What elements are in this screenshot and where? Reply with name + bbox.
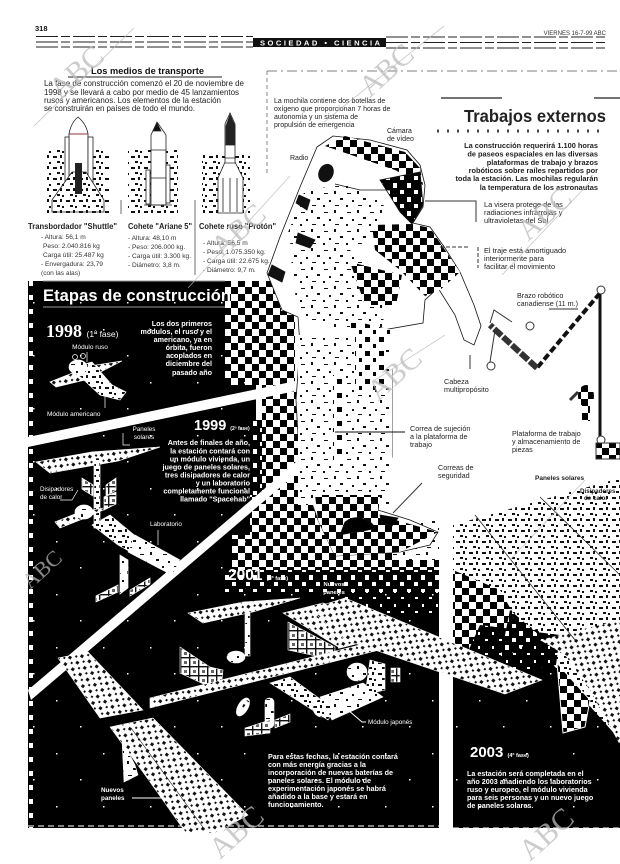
specs: Ariane: - Peso: 206.000 kg. bbox=[128, 244, 185, 251]
specs: Proton: - Peso: 1.075.350 kg. bbox=[203, 249, 266, 256]
text 1999: juego de paneles solares, bbox=[162, 462, 250, 472]
illustration: astronaut bbox=[267, 136, 481, 556]
specs: Shuttle: Carga útil: 25.487 kg bbox=[43, 252, 104, 259]
panel: transport bbox=[28, 66, 276, 277]
label: modulo japones: Módulo japonés bbox=[368, 719, 412, 726]
text 2001: incorporación de nuevas baterías de bbox=[268, 768, 393, 777]
new panels bbox=[58, 652, 248, 833]
white diagonal band 2 bbox=[28, 450, 310, 700]
illustration: robotic arm bbox=[487, 286, 620, 459]
label: mochila: oxígeno que proporcionan 7 horas de bbox=[274, 106, 390, 113]
text: trabajos externos: toda la estación. Las mochilas regularán bbox=[455, 174, 598, 183]
date line: VIERNES 16-7-99 ABC bbox=[544, 31, 607, 37]
intro text: se construirán en países de todo el mundo. bbox=[44, 104, 195, 113]
section header bbox=[36, 36, 606, 48]
callout: plataforma: piezas bbox=[512, 445, 533, 454]
label: camara bbox=[387, 128, 414, 143]
callout: correas: seguridad bbox=[438, 471, 470, 480]
text: trabajos externos: la temperatura de los astronautas bbox=[480, 183, 598, 192]
text: trabajos externos: plataformas de trabajo y brazos bbox=[487, 158, 598, 167]
icon: proton bbox=[202, 113, 250, 215]
text 1999: y un laboratorio bbox=[196, 478, 251, 488]
specs: Ariane: - Carga útil: 3.300 kg. bbox=[128, 253, 191, 260]
label: nuevos paneles top: Nuevos bbox=[324, 582, 344, 588]
text 2001: Para estas fechas, la estación contará bbox=[268, 752, 399, 761]
watermark ABC labels: ABC bbox=[361, 341, 429, 407]
year 1998: 1998 (1ª fase) bbox=[46, 321, 119, 341]
specs: Shuttle: Peso: 2.040.816 kg bbox=[43, 243, 100, 250]
label: camara: Cámara bbox=[387, 128, 412, 135]
specs: Ariane: - Altura: 48,10 m bbox=[128, 235, 177, 242]
icon: ariane bbox=[128, 122, 178, 215]
text: trabajos externos: robóticos sobre raíles repartidos por bbox=[469, 166, 598, 175]
intro text bbox=[44, 79, 245, 113]
panel: bottom right bbox=[453, 478, 620, 828]
callout: cabeza bbox=[444, 355, 489, 394]
specs: Shuttle: - Envergadura: 23,79 bbox=[41, 261, 103, 268]
section header: SOCIEDAD • CIENCIA bbox=[260, 38, 381, 48]
label: paneles solares: solares bbox=[134, 434, 154, 441]
watermark ABC labels: ABC bbox=[205, 197, 273, 263]
text 1998: acoplados en bbox=[166, 351, 212, 360]
icon: station 1998 bbox=[50, 352, 126, 408]
text 1999: un módulo vivienda, un bbox=[170, 454, 250, 464]
watermarks bbox=[34, 26, 592, 560]
label: nuevos paneles top: paneles bbox=[323, 590, 345, 596]
callout: traje bbox=[440, 246, 566, 271]
label: Ariane: Cohete "Ariane 5" bbox=[128, 222, 192, 231]
specs: Proton bbox=[203, 240, 270, 274]
callout: plataforma: y almacenamiento de bbox=[512, 437, 580, 446]
text 2001: experimentación japonés se habrá bbox=[268, 784, 387, 793]
text 1998: Los dos primeros bbox=[152, 319, 212, 328]
heading: etapas: Etapas de construcción bbox=[43, 287, 231, 305]
text 1999 bbox=[162, 438, 251, 504]
label: laboratorio: Laboratorio bbox=[150, 521, 182, 528]
watermark ABC labels: ABC bbox=[511, 181, 579, 247]
text 2003 panel bbox=[467, 744, 594, 810]
intro text: rusos y americanos. Los elementos de la estación bbox=[44, 96, 221, 105]
panel: 1999 bbox=[36, 418, 251, 602]
callout: traje: interiormente para bbox=[484, 254, 545, 263]
specs: Proton: - Altura: 56,5 m bbox=[203, 240, 248, 247]
label: disipadores right: de calor bbox=[584, 495, 608, 502]
text 2003 panel: 2003 (4ª fase) bbox=[470, 744, 529, 761]
label: mochila: propulsión de emergencia bbox=[274, 122, 355, 129]
text 1999: completamente funcional bbox=[163, 486, 250, 496]
text 2001: funcionamiento. bbox=[268, 800, 324, 809]
panel: black background bbox=[28, 281, 439, 828]
watermark ABC labels: ABC bbox=[17, 545, 67, 594]
callout: brazo bbox=[517, 291, 578, 309]
text: trabajos externos bbox=[455, 141, 598, 192]
text 2003 panel: año 2003 añadiendo los laboratorios bbox=[467, 777, 592, 786]
text: trabajos externos: de paseos espaciales en las diversas bbox=[467, 150, 598, 158]
label: paneles solares right: Paneles solares bbox=[535, 475, 585, 482]
callout: cabeza: Cabeza bbox=[444, 377, 469, 386]
callout: brazo: Brazo robótico bbox=[517, 291, 563, 300]
callout: traje: facilitar el movimiento bbox=[484, 262, 555, 271]
text 2001 bbox=[268, 752, 399, 809]
callout: visera: La visera protege de las bbox=[484, 200, 563, 209]
label: paneles solares: Paneles bbox=[133, 426, 155, 433]
intro text: La fase de construcción comenzó el 20 de noviembre de bbox=[44, 79, 245, 88]
callout: correa: trabajo bbox=[410, 440, 432, 449]
specs: Ariane: - Diámetro: 3,8 m. bbox=[128, 262, 181, 269]
label: disipadores: de calor bbox=[40, 494, 62, 501]
callout: plataforma bbox=[512, 429, 581, 454]
callout: correa bbox=[335, 424, 470, 449]
specs: Shuttle: (con las alas) bbox=[41, 270, 80, 277]
specs: Proton: - Carga útil: 22.675 kg. bbox=[203, 258, 270, 265]
text 1998: americano, ya en bbox=[154, 335, 212, 344]
label: disipadores bbox=[40, 486, 73, 501]
label: nuevos paneles bbox=[101, 787, 165, 802]
callout: correas bbox=[393, 463, 474, 513]
watermark ABC labels: ABC bbox=[203, 799, 271, 864]
callout: correa: Correa de sujeción bbox=[410, 424, 470, 433]
callout: plataforma: Plataforma de trabajo bbox=[512, 429, 581, 438]
icon: station 2001 bbox=[150, 598, 407, 736]
callout: traje: El traje está amortiguado bbox=[484, 246, 566, 255]
callout: correa: a la plataforma de bbox=[410, 432, 468, 441]
icon: small astronaut bbox=[570, 385, 594, 421]
year 2001: 2001 (3ª fase) bbox=[228, 567, 288, 584]
text 1999: la estación contará con bbox=[170, 446, 250, 456]
callout: brazo: canadiense (11 m.) bbox=[517, 299, 578, 308]
label: disipadores right bbox=[580, 488, 616, 502]
icon: station 1999 bbox=[36, 433, 180, 602]
text: trabajos externos: La construcción requerirá 1.100 horas bbox=[464, 141, 598, 150]
intro text: 1998 y se llevará a cabo por medio de 45 lanzamientos bbox=[44, 88, 239, 97]
text 2003 panel: ruso y europeo, el módulo vivienda bbox=[467, 785, 589, 794]
label: mochila: La mochila contiene dos botellas de bbox=[274, 98, 385, 105]
text 1998 bbox=[140, 319, 213, 377]
text 1999: tres disipadores de calor bbox=[165, 470, 250, 480]
year 1999: 1999 (2ª fase) bbox=[194, 418, 250, 434]
text 2003 panel: de paneles solares. bbox=[467, 801, 533, 810]
long truss bbox=[310, 598, 542, 694]
text 2001: con más energía gracias a la bbox=[268, 760, 367, 769]
label: paneles solares bbox=[133, 426, 155, 441]
watermark ABC labels: ABC bbox=[43, 39, 111, 105]
icon: shuttle bbox=[47, 117, 109, 214]
label: disipadores: Disipadores bbox=[40, 486, 73, 493]
text 1999: llamado "Spacehab" bbox=[180, 494, 250, 504]
callout: visera: ultravioletas del Sol bbox=[484, 216, 548, 225]
specs: Proton: - Diámetro: 9,7 m. bbox=[203, 267, 256, 274]
label: Proton: Cohete ruso "Protón" bbox=[199, 222, 276, 231]
label: nuevos paneles: paneles bbox=[101, 795, 125, 802]
heading: transport: Los medios de transporte bbox=[91, 66, 204, 76]
page number: 318 bbox=[35, 24, 48, 33]
label: camara: de vídeo bbox=[387, 136, 414, 143]
text 2001: añadido a la base y estará en bbox=[268, 792, 367, 801]
white diagonal band 1 bbox=[28, 378, 310, 447]
label: mochila bbox=[274, 98, 390, 129]
callout: visera bbox=[425, 200, 563, 225]
callout: correas: Correas de bbox=[438, 463, 474, 472]
text 2003 panel: para seis personas y un nuevo juego bbox=[467, 793, 594, 802]
label: modulo americano: Módulo americano bbox=[47, 411, 101, 418]
text 1998: diciembre del bbox=[166, 359, 212, 368]
text 1998: módulos, el ruso y el bbox=[140, 327, 212, 336]
specs: Shuttle bbox=[41, 234, 104, 277]
label: mochila: autonomía y un sistema de bbox=[274, 114, 358, 121]
callout: cabeza: multipropósito bbox=[444, 385, 489, 394]
watermark ABC labels: ABC bbox=[353, 37, 421, 103]
label: disipadores right: Disipadores bbox=[580, 488, 616, 495]
text 1998: órbita, fueron bbox=[166, 343, 212, 352]
heading: etapas bbox=[43, 281, 231, 307]
panel: 2001 bbox=[58, 567, 542, 833]
label: nuevos paneles top bbox=[323, 582, 345, 596]
callout: visera: radiaciones infrarrojas y bbox=[484, 208, 563, 217]
specs: Ariane bbox=[128, 235, 191, 269]
text 2001: paneles solares. El módulo de bbox=[268, 776, 371, 785]
text 1998: pasado año bbox=[172, 368, 213, 377]
specs: Shuttle: - Altura: 56,1 m bbox=[41, 234, 86, 241]
panel: 1998 bbox=[46, 319, 213, 418]
title: trabajos externos: Trabajos externos bbox=[464, 106, 606, 126]
text 2003 panel: La estación será completada en el bbox=[467, 769, 584, 778]
label: radio: Radio bbox=[290, 155, 308, 162]
label: modulo ruso: Módulo ruso bbox=[72, 344, 108, 351]
text 1999: Antes de finales de año, bbox=[168, 438, 250, 447]
label: nuevos paneles: Nuevos bbox=[101, 787, 124, 794]
label: Shuttle: Transbordador "Shuttle" bbox=[28, 222, 117, 231]
label: modulo japones bbox=[348, 710, 412, 726]
